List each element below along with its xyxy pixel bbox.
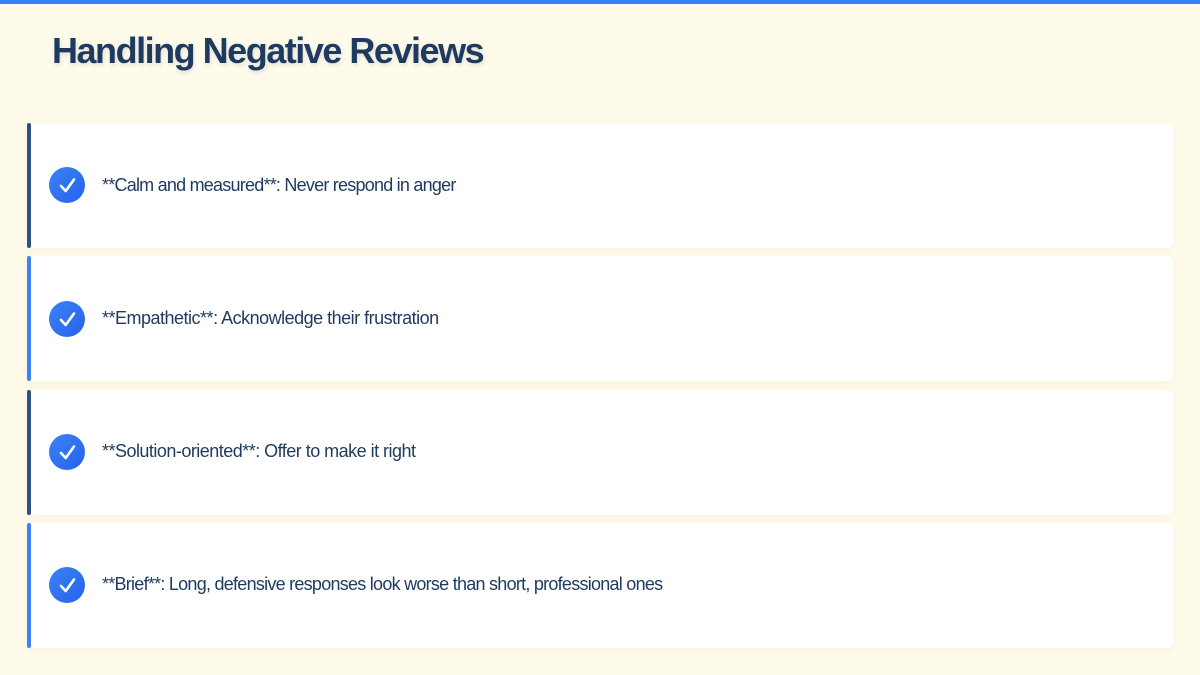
panel: calm and measured — [27, 123, 1173, 248]
icon: check mark — [49, 434, 85, 470]
text: brief: **Brief**: Long, defensive responses look worse than short, professional ones — [102, 574, 662, 594]
panel: brief — [27, 523, 1173, 648]
text: solution-oriented: **Solution-oriented**: Offer to make it right — [102, 441, 415, 461]
panel: empathetic — [27, 256, 1173, 381]
title: Handling Negative Reviews — [52, 30, 483, 71]
text: empathetic: **Empathetic**: Acknowledge their frustration — [102, 308, 439, 328]
text: calm and measured: **Calm and measured**: Never respond in anger — [102, 175, 456, 195]
icon: check mark — [49, 301, 85, 337]
icon: check mark — [49, 167, 85, 203]
icon: check mark — [49, 567, 85, 603]
panel: solution-oriented — [27, 390, 1173, 515]
top accent bar — [0, 0, 1200, 4]
